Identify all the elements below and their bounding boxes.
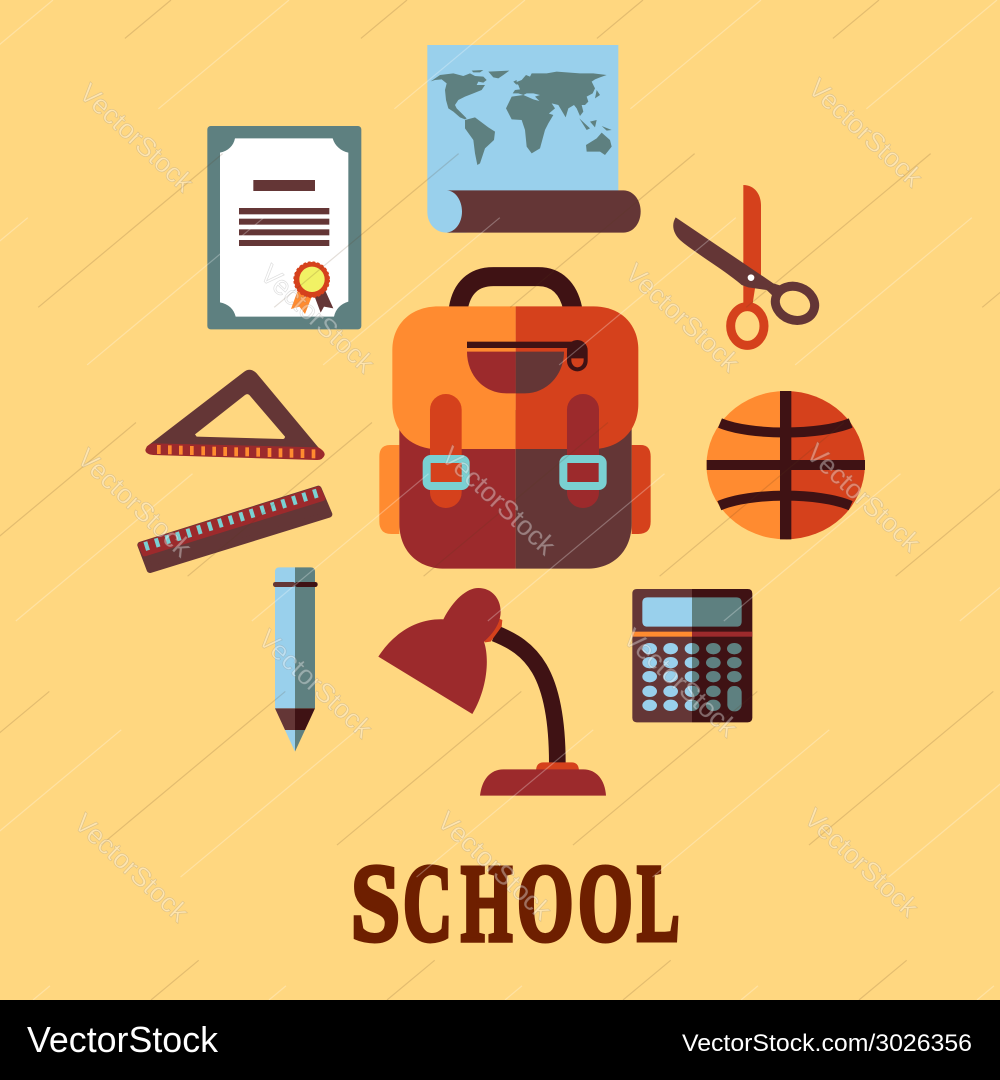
- watermarks and diagonal scratches overlay: VectorStock: [431, 806, 558, 926]
- left buckle: [427, 459, 466, 486]
- certificate text lines: [239, 180, 329, 246]
- watermarks and diagonal scratches overlay: VectorStock: [435, 441, 562, 561]
- map roll: [445, 190, 641, 233]
- title: C: [403, 842, 452, 964]
- ball halves: [706, 391, 865, 539]
- title: S: [351, 842, 400, 964]
- footer bar: [0, 1000, 1000, 1080]
- map sheet: [427, 45, 618, 233]
- title: H: [461, 842, 512, 964]
- watermarks and diagonal scratches overlay: VectorStock: [617, 623, 744, 743]
- flap: [392, 306, 638, 449]
- icon: diploma certificate: [207, 126, 361, 329]
- watermarks and diagonal scratches overlay: VectorStock: [71, 443, 198, 563]
- side pockets: [379, 445, 651, 534]
- title: [351, 842, 680, 964]
- ball seams: [707, 391, 865, 539]
- icon: calculator: [632, 589, 752, 722]
- right strap: [567, 394, 599, 508]
- pencil body: [275, 567, 315, 708]
- calculator body: [632, 589, 752, 722]
- front pocket: [467, 352, 564, 393]
- lamp base: [480, 762, 606, 796]
- title: O: [578, 842, 633, 964]
- certificate frame: [207, 126, 361, 329]
- watermarks and diagonal scratches overlay: VectorStock: [73, 78, 200, 198]
- icon: desk lamp: [378, 588, 606, 796]
- title: L: [637, 842, 680, 964]
- icon: world map scroll: [427, 45, 641, 233]
- icon: basketball: [706, 391, 865, 539]
- icon: backpack: [379, 277, 651, 569]
- lamp arm: [495, 633, 557, 763]
- watermarks and diagonal scratches overlay: VectorStock: [798, 803, 925, 923]
- orange blade: [731, 185, 764, 345]
- pencil band: [273, 582, 318, 587]
- ribbon seal: [291, 262, 333, 314]
- handle: [458, 277, 573, 308]
- right buckle: [563, 459, 603, 486]
- calculator buttons: [642, 643, 692, 711]
- calculator screen: [642, 597, 742, 627]
- watermarks and diagonal scratches overlay: VectorStock: [68, 808, 195, 928]
- ruler: [141, 489, 329, 570]
- watermarks and diagonal scratches overlay: VectorStock: [619, 258, 746, 378]
- icon: scissors: [673, 185, 819, 345]
- pencil tip: [275, 708, 315, 752]
- certificate paper: [220, 138, 348, 317]
- icon: pencil: [273, 567, 318, 752]
- body: [399, 410, 632, 569]
- left strap: [430, 394, 462, 508]
- watermarks and diagonal scratches overlay: VectorStock: [254, 259, 381, 379]
- lamp connector: [483, 618, 502, 642]
- footer url text: VectorStock.com/3026356: [682, 1030, 972, 1057]
- icon: set square and ruler: [141, 370, 329, 570]
- zipper: [467, 340, 588, 371]
- calculator stripe: [632, 632, 752, 637]
- title: O: [517, 842, 573, 964]
- footer logo text: VectorStock: [27, 1019, 219, 1060]
- brown blade: [673, 217, 819, 326]
- watermarks and diagonal scratches overlay: VectorStock: [252, 624, 379, 744]
- watermarks and diagonal scratches overlay: VectorStock: [800, 438, 927, 558]
- lamp shade: [378, 588, 501, 714]
- pivot: [748, 274, 754, 281]
- set square: [145, 370, 325, 460]
- watermarks and diagonal scratches overlay: VectorStock: [802, 73, 929, 193]
- world map continents: [431, 70, 612, 165]
